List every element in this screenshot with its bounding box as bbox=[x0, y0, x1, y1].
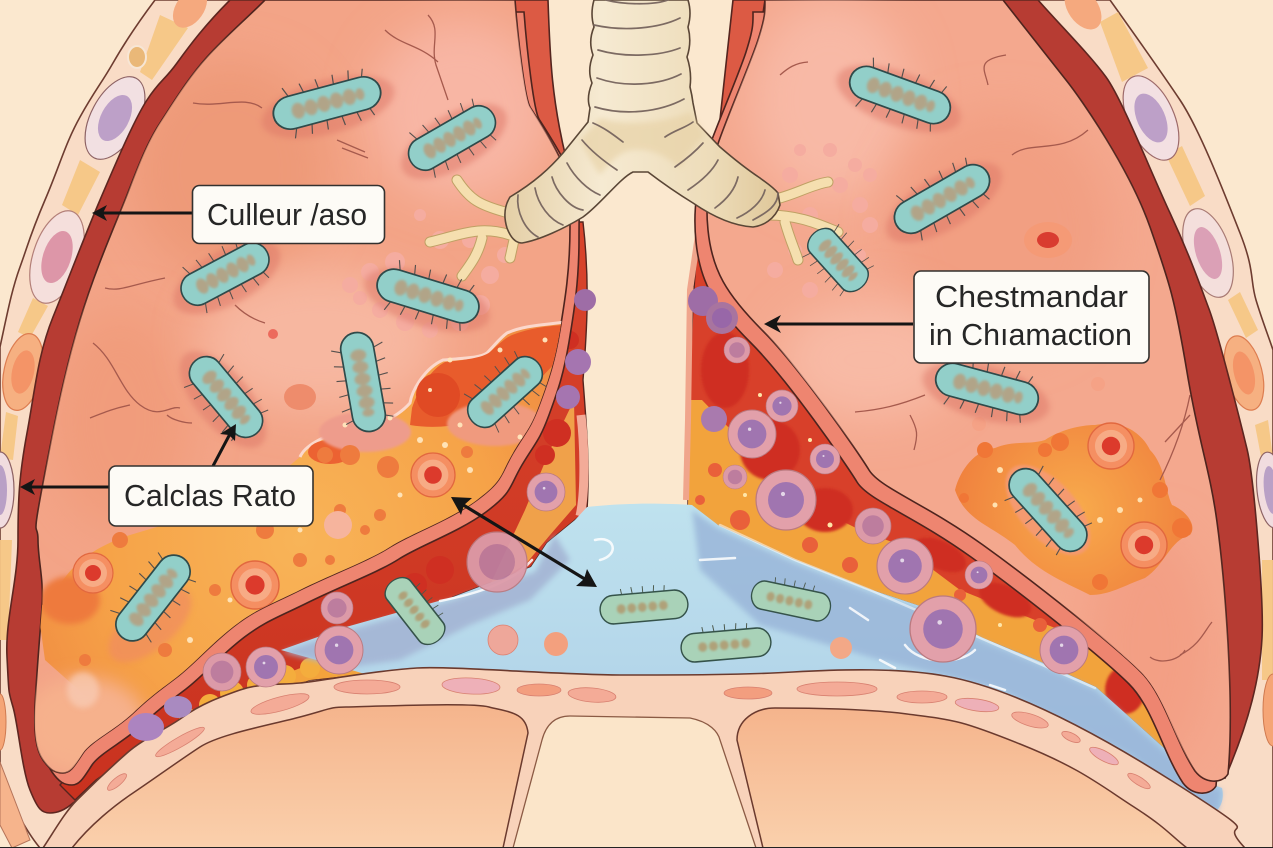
small tan oval bbox=[128, 46, 146, 68]
bacterium bbox=[398, 92, 506, 184]
rib cell: purple bbox=[1112, 68, 1190, 168]
consolidation cells left bbox=[73, 553, 113, 593]
bacterium bbox=[176, 344, 276, 450]
consolidation cells right bbox=[1088, 423, 1134, 469]
bacterium bbox=[884, 150, 1000, 248]
bacterium bbox=[267, 64, 387, 142]
bacterium bbox=[370, 256, 486, 336]
bronchus shading bbox=[580, 112, 705, 175]
exudate bubbles right bbox=[695, 463, 1047, 632]
airway branches left bbox=[430, 180, 514, 276]
pleural fluid bbox=[281, 504, 1223, 816]
arrow: double headed bbox=[451, 497, 597, 587]
arrow: to lower left wall bbox=[20, 479, 109, 495]
visceral band right bbox=[695, 12, 1218, 793]
right chest wall bbox=[1020, 0, 1273, 848]
orange exudate on left strip edge bbox=[490, 400, 576, 585]
rib cell: lower orange bbox=[1263, 674, 1273, 746]
pale outer stripe left bbox=[580, 415, 584, 516]
right lung bbox=[695, 0, 1230, 793]
exudate cells bbox=[128, 286, 1088, 741]
label: Chestmandar in Chiamaction: Chestmandar bbox=[935, 279, 1128, 314]
slate shaded fluid bbox=[692, 510, 1222, 812]
floating bacterium bbox=[679, 620, 772, 663]
red-orange zone bbox=[410, 325, 565, 427]
bacterium bbox=[796, 217, 880, 303]
consolidated orange region left bbox=[38, 322, 590, 715]
rib cell: orange bbox=[1217, 332, 1271, 414]
airway branches right bbox=[768, 182, 838, 260]
right diaphragm dome bbox=[737, 708, 1187, 848]
left red parietal band bbox=[7, 0, 300, 813]
visceral band left bbox=[44, 12, 579, 785]
rib cell: lilac bbox=[1253, 451, 1273, 529]
bacterium bbox=[171, 229, 279, 319]
bacterium bbox=[455, 343, 555, 441]
pale rim of consolidation bbox=[300, 322, 565, 457]
floating bacterium bbox=[598, 582, 689, 625]
cyst upper right bbox=[1024, 222, 1072, 258]
bacterium bbox=[329, 328, 397, 436]
rib cell: top orange bbox=[1057, 0, 1109, 36]
right pleural exudate strip bbox=[688, 217, 1205, 785]
arrow: to right lung bbox=[764, 315, 913, 333]
rib cell: orange bbox=[0, 330, 50, 414]
left chest wall bbox=[0, 0, 280, 848]
alveolar patch bbox=[342, 209, 513, 338]
left pleural exudate strip bbox=[60, 222, 588, 800]
diaphragm bbox=[43, 668, 1245, 848]
medial pleura left bbox=[60, 0, 588, 800]
rib cell: lower orange bbox=[0, 694, 6, 750]
left lung texture bbox=[23, 20, 590, 773]
floating bacterium bbox=[749, 572, 834, 623]
peach lower corner bbox=[23, 677, 147, 773]
red patches right bbox=[701, 332, 1145, 714]
arrow: to bacterium bbox=[213, 424, 236, 466]
label: Chestmandar in Chiamaction: in Chıamaction bbox=[929, 317, 1132, 352]
label: Chestmandar in Chiamaction bbox=[914, 271, 1149, 363]
rib cell: pink bbox=[19, 204, 95, 310]
bacterium bbox=[842, 53, 958, 137]
label: Culleur /aso bbox=[192, 186, 384, 244]
alveolar patch bbox=[767, 143, 878, 298]
rib cell: pink bbox=[1173, 202, 1243, 304]
fluid highlights bbox=[412, 525, 1095, 690]
central mediastinal gap bbox=[513, 716, 756, 848]
bacterium bbox=[930, 350, 1044, 428]
red spots left bbox=[403, 331, 579, 597]
left lung bbox=[23, 0, 590, 785]
rib cell: lilac bbox=[0, 452, 14, 528]
rib cell: purple bbox=[73, 67, 157, 169]
arrow: to left wall bbox=[92, 205, 192, 221]
pale outer strip right bbox=[686, 235, 698, 500]
label: Calclas Rato bbox=[109, 466, 313, 526]
rib cell: top orange bbox=[166, 0, 214, 34]
tan connective segments bbox=[0, 15, 188, 640]
bacteria halos bbox=[162, 51, 1056, 462]
right red parietal band bbox=[980, 0, 1262, 778]
bacteria bbox=[102, 53, 1101, 663]
left diaphragm dome bbox=[72, 705, 528, 848]
bacterium bbox=[995, 455, 1101, 565]
tan connective segments bbox=[1100, 12, 1273, 680]
right lung texture bbox=[750, 0, 1210, 770]
floating bacterium bbox=[380, 568, 455, 650]
pink halos bbox=[319, 412, 411, 452]
bacterium bbox=[102, 543, 204, 653]
exudate dots bbox=[79, 445, 473, 666]
trachea and main bronchi bbox=[505, 0, 780, 243]
tracheal rings bbox=[518, 0, 778, 237]
medial pleura right bbox=[686, 0, 1205, 785]
label: Calclas Rato: Calclas Rato bbox=[124, 478, 296, 513]
diaphragm ovals bbox=[105, 676, 1152, 793]
airway scratch lines right bbox=[780, 55, 1212, 661]
airway scratch lines left bbox=[90, 15, 448, 423]
consolidated orange region right bbox=[955, 424, 1192, 595]
orange exudate right bbox=[688, 400, 1164, 748]
label: Culleur /aso: Culleur /aso bbox=[207, 197, 367, 232]
bubbles left bbox=[163, 652, 407, 744]
small reddish cyst bbox=[284, 384, 316, 410]
